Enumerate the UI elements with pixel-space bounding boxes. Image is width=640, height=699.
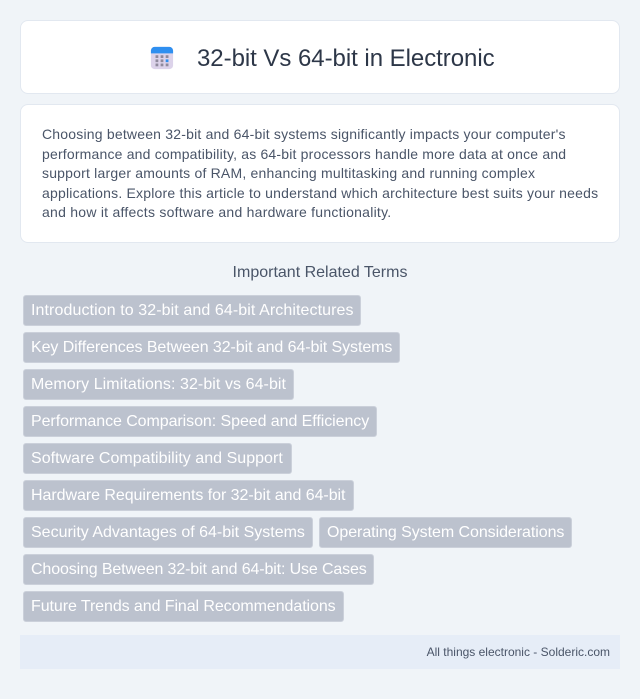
footer: All things electronic - Solderic.com [427, 645, 610, 659]
footer [20, 635, 620, 669]
tag: performance comparison [23, 406, 377, 437]
tag: operating system [319, 517, 572, 548]
icon: calendar [150, 46, 174, 70]
tag: security advantages [23, 517, 313, 548]
tag: key differences: Key Differences Between 32-bit and 64-bit Systems [31, 339, 392, 356]
panel: header [20, 20, 620, 94]
heading: important related terms: Important Related Terms [233, 264, 407, 281]
panel: intro text: and how it affects software and hardware functionality. [42, 204, 391, 220]
tag: memory limitations [23, 369, 294, 400]
tag: future trends [23, 591, 344, 622]
tag: hardware requirements: Hardware Requirements for 32-bit and 64-bit [31, 487, 345, 504]
tag: security advantages: Security Advantages of 64-bit Systems [31, 524, 305, 541]
panel: intro text: Choosing between 32-bit and 64-bit systems significantly impacts your computer's [42, 126, 566, 142]
tag: key differences [23, 332, 400, 363]
tag: software compatibility [23, 443, 292, 474]
panel: intro text: applications. Explore this article to understand which architecture best suits your needs [42, 185, 598, 201]
tag: memory limitations: Memory Limitations: 32-bit vs 64-bit [31, 376, 286, 393]
tag: future trends: Future Trends and Final Recommendations [31, 598, 336, 615]
tag: choosing: Choosing Between 32-bit and 64-bit: Use Cases [31, 561, 367, 578]
panel: intro text: performance and compatibility, as 64-bit processors handle more data at once and [42, 146, 566, 162]
tag: hardware requirements [23, 480, 354, 511]
title: 32-bit Vs 64-bit in Electronic [197, 45, 495, 72]
panel: intro text [20, 104, 620, 243]
tag: introduction: Introduction to 32-bit and 64-bit Architectures [31, 302, 354, 319]
tag: performance comparison: Performance Comparison: Speed and Efficiency [31, 413, 369, 430]
tag: choosing [23, 554, 374, 585]
tag: software compatibility: Software Compatibility and Support [31, 450, 283, 467]
panel: intro text: support larger amounts of RAM, enhancing multitasking and running complex [42, 165, 535, 181]
tag: operating system: Operating System Considerations [327, 524, 564, 541]
tag: introduction [23, 295, 361, 326]
